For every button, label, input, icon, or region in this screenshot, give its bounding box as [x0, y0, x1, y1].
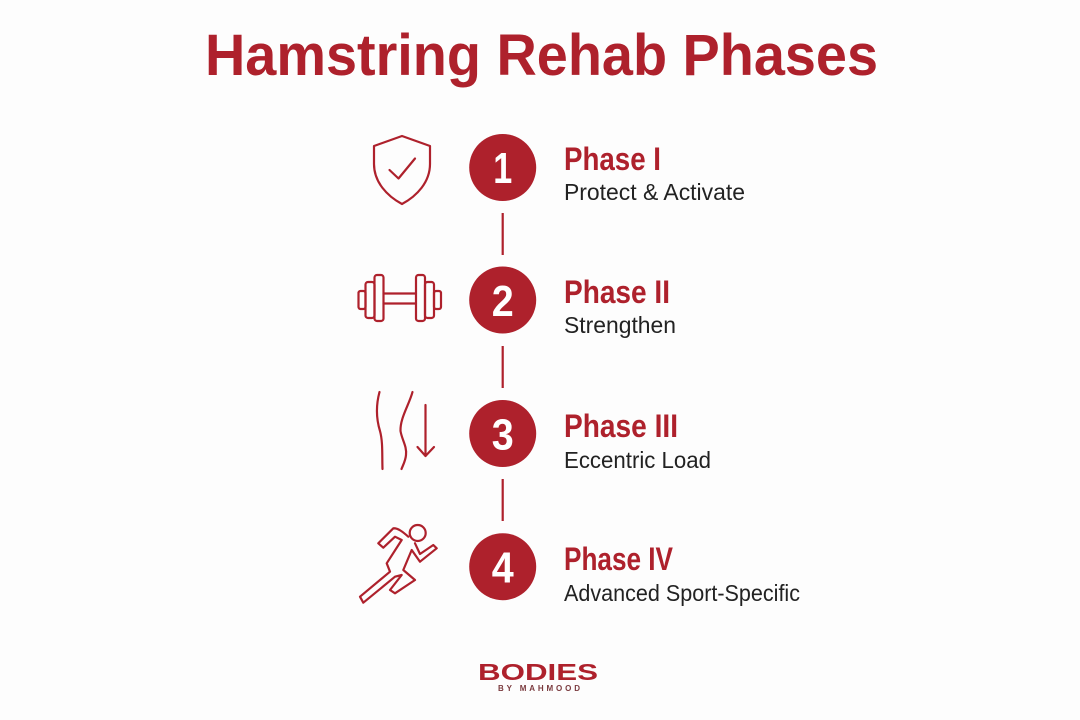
phase 1 text: Phase I	[564, 141, 661, 177]
connector 1-2	[502, 213, 504, 255]
icon: hamstring lengthening with down arrow	[377, 392, 434, 469]
logo: Bodies by Mahmood	[478, 659, 598, 693]
icon: dumbbell	[358, 275, 441, 321]
number badge 2	[469, 266, 536, 334]
phase 2 text: Phase II	[564, 274, 670, 310]
phase 4 text: Phase IV	[564, 541, 674, 577]
phase 4 text: Advanced Sport-Specific	[564, 580, 800, 606]
logo: Bodies by Mahmood: BY MAHMOOD	[498, 684, 580, 693]
phase 2 text: Strengthen	[564, 312, 676, 338]
phase 3 text: Phase III	[564, 408, 678, 444]
icon: shield with check	[374, 136, 430, 204]
number badge 1	[469, 134, 536, 201]
number badge 4	[469, 533, 536, 600]
connector 3-4	[502, 479, 504, 521]
phase 3 text	[564, 408, 711, 473]
connector 2-3	[502, 346, 504, 388]
step 1: Protect & Activate	[374, 134, 745, 205]
number badge 3	[469, 400, 536, 467]
step 2: Strengthen	[358, 266, 676, 338]
number badge 3: 3	[492, 410, 514, 460]
number badge 1: 1	[493, 144, 512, 193]
phase 2 text	[564, 274, 676, 338]
number badge 4: 4	[492, 544, 514, 592]
title: Hamstring Rehab Phases	[205, 23, 878, 88]
logo: Bodies by Mahmood: BODIES	[478, 659, 598, 685]
number badge 2: 2	[492, 277, 514, 326]
phase 3 text: Eccentric Load	[564, 447, 711, 473]
phase 1 text	[564, 141, 745, 205]
phase 1 text: Protect & Activate	[564, 179, 745, 205]
step 3: Eccentric Load	[377, 392, 711, 473]
step 4: Advanced Sport-Specific	[360, 525, 800, 606]
icon: sprinting runner	[360, 525, 437, 603]
phase 4 text	[564, 541, 800, 606]
